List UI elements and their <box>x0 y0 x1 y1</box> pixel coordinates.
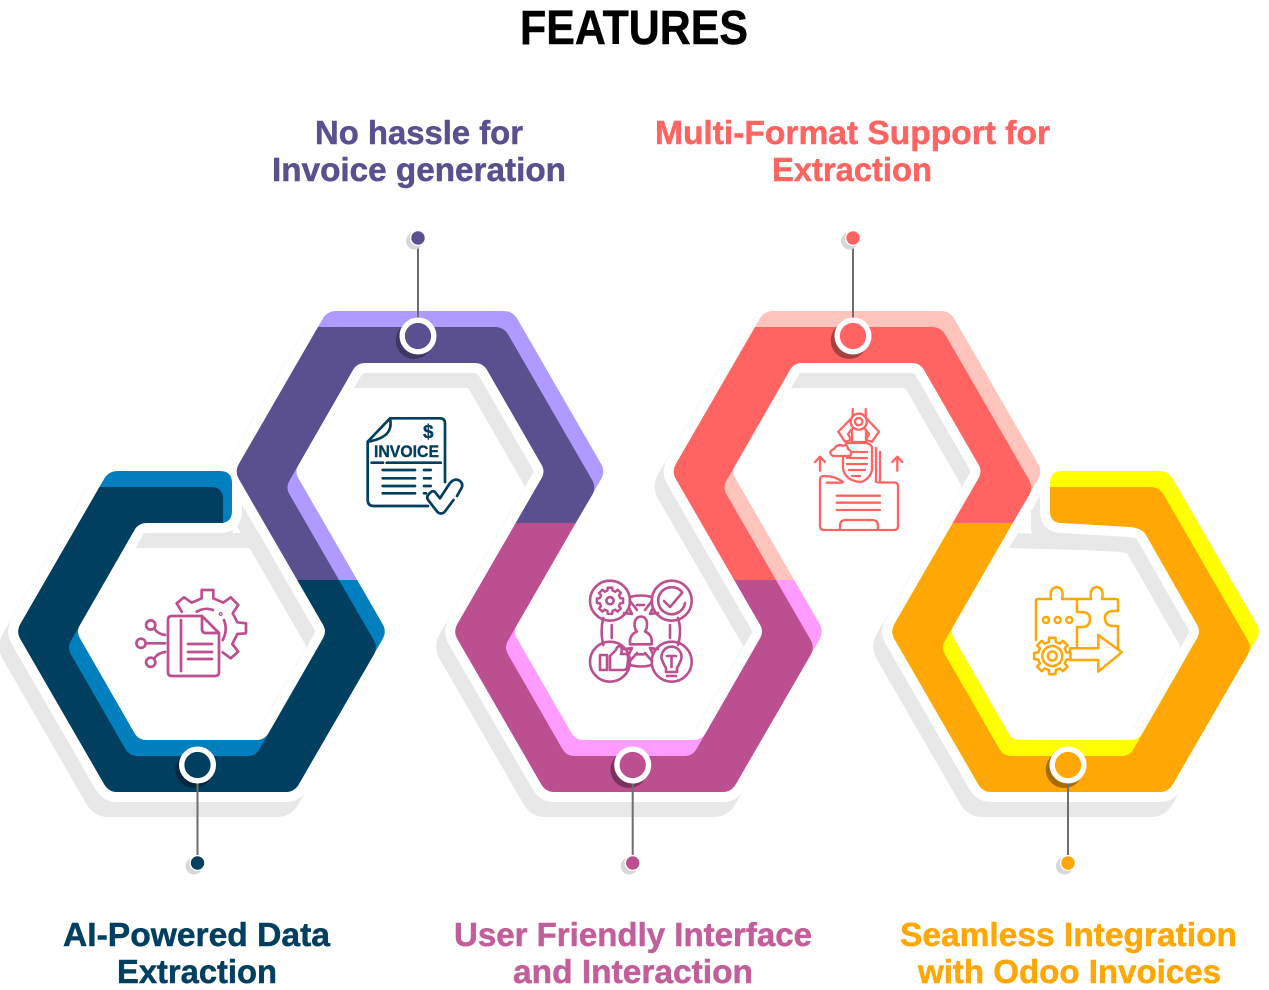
hexagon segment: AI-Powered Data Extraction <box>18 471 385 792</box>
heading: Seamless Integration with Odoo Invoices: Seamless Integration <box>900 916 1237 953</box>
hexagon segment: Multi-Format Support for Extraction <box>674 311 1040 580</box>
heading: No hassle for Invoice generation: Invoice generation <box>272 151 566 188</box>
white outline of the hexagon ribbon <box>18 311 1259 792</box>
heading: Seamless Integration with Odoo Invoices <box>900 916 1237 990</box>
connector: Multi-Format Support for Extraction <box>831 230 869 359</box>
heading: No hassle for Invoice generation: No hassle for <box>315 114 523 151</box>
title: FEATURES <box>520 2 748 55</box>
heading: User Friendly Interface and Interaction <box>454 916 812 990</box>
icon: puzzle pieces with gear and arrow <box>1034 587 1122 674</box>
heading: Seamless Integration with Odoo Invoices: with Odoo Invoices <box>917 953 1221 990</box>
icon: invoice with check mark: $ <box>423 422 434 443</box>
connector: No hassle for Invoice generation <box>396 230 434 359</box>
hexagon segment: Seamless Integration with Odoo Invoices <box>892 471 1259 792</box>
heading: Multi-Format Support for Extraction: Extraction <box>772 151 932 188</box>
grey inner shadow bars in the open hexagons <box>137 533 1189 647</box>
heading: AI-Powered Data Extraction: AI-Powered Data <box>63 916 331 953</box>
icon: document with gear and data nodes <box>136 590 246 676</box>
heading: AI-Powered Data Extraction <box>63 916 331 990</box>
connector: User Friendly Interface and Interaction <box>610 749 648 874</box>
icon: invoice with check mark: INVOICE <box>374 442 439 461</box>
grey drop shadow of the hexagon ribbon <box>9 326 1250 807</box>
hexagon segment: User Friendly Interface and Interaction <box>455 523 822 792</box>
icon: robot extracting documents from a printer <box>815 409 902 530</box>
connector: AI-Powered Data Extraction <box>175 749 213 874</box>
heading: User Friendly Interface and Interaction: User Friendly Interface <box>454 916 812 953</box>
icon: user with four connected bubbles <box>590 581 692 682</box>
heading: Multi-Format Support for Extraction: Multi-Format Support for <box>655 114 1050 151</box>
hexagon segment: No hassle for Invoice generation <box>237 311 603 580</box>
connector: Seamless Integration with Odoo Invoices <box>1046 749 1084 874</box>
heading: No hassle for Invoice generation <box>272 114 566 188</box>
heading: Multi-Format Support for Extraction <box>655 114 1050 188</box>
icon: invoice with check mark <box>368 418 462 514</box>
heading: User Friendly Interface and Interaction: and Interaction <box>513 953 753 990</box>
heading: AI-Powered Data Extraction: Extraction <box>117 953 277 990</box>
